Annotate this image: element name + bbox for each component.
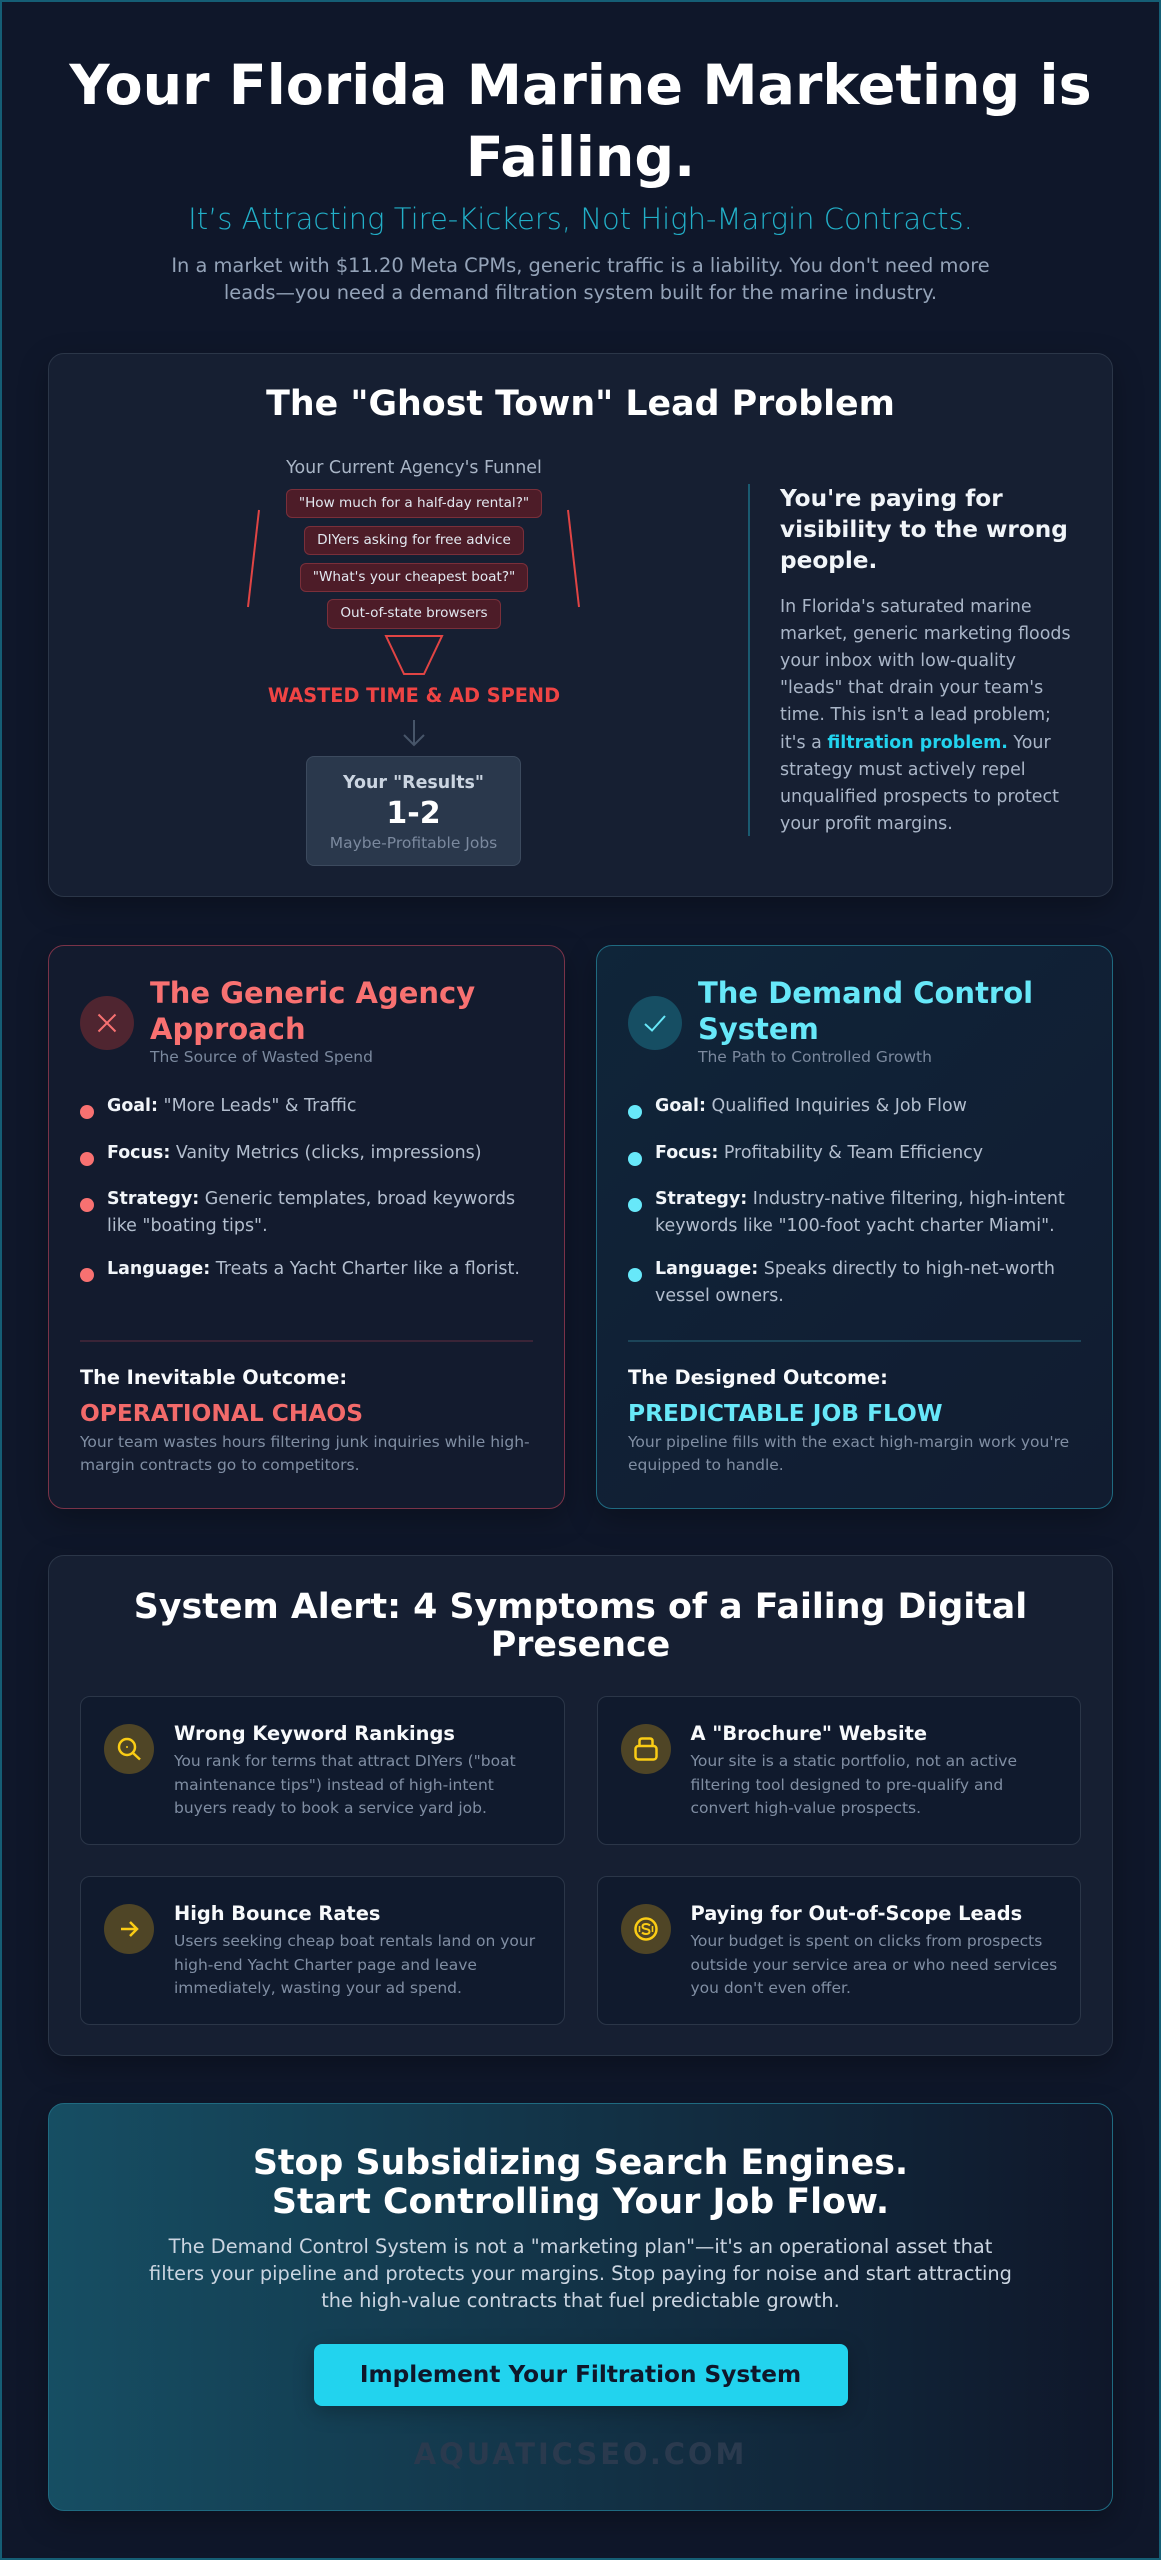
- symptom title: Wrong Keyword Rankings: [174, 1722, 455, 1744]
- symptom text: [174, 1752, 516, 1817]
- symptom text: You rank for terms that attract DIYers ("boat: [174, 1752, 516, 1770]
- title: Your Florida Marine Marketing is: [69, 52, 1092, 118]
- explanation heading: visibility to the wrong: [780, 516, 1068, 543]
- outcome description: Your pipeline fills with the exact high-margin work you're: [628, 1432, 1069, 1450]
- down arrow: [404, 720, 424, 746]
- lead pills: "What's your cheapest boat?": [313, 569, 515, 585]
- card title: The Demand Control: [698, 976, 1033, 1010]
- bullet: goal: Goal: Qualified Inquiries & Job Flow: [655, 1096, 967, 1116]
- symptom: wrong keyword rankings: [80, 1696, 564, 1845]
- explanation text: market, generic marketing floods: [780, 624, 1071, 644]
- symptom text: Your site is a static portfolio, not an active: [690, 1752, 1017, 1770]
- symptom text: immediately, wasting your ad spend.: [174, 1979, 462, 1997]
- intro text: In a market with $11.20 Meta CPMs, generic traffic is a liability. You don't need more: [171, 254, 990, 276]
- outcome description: [80, 1432, 530, 1474]
- funnel diagram: [247, 458, 580, 866]
- symptom text: you don't even offer.: [690, 1979, 851, 1997]
- card title: [150, 976, 475, 1046]
- symptom title: High Bounce Rates: [174, 1902, 380, 1924]
- subtitle: It’s Attracting Tire-Kickers, Not High-Margin Contracts.: [188, 202, 973, 236]
- cta button: Implement Your Filtration System: [360, 2361, 801, 2388]
- divider: [80, 1340, 533, 1342]
- cta text: the high-value contracts that fuel predictable growth.: [321, 2289, 840, 2312]
- symptom text: high-end Yacht Charter page and leave: [174, 1956, 477, 1974]
- explanation text: time. This isn't a lead problem;: [780, 705, 1051, 725]
- symptom text: convert high-value prospects.: [690, 1799, 921, 1817]
- outcome label: The Designed Outcome:: [628, 1366, 888, 1389]
- title: [68, 52, 1092, 190]
- bullet: strategy: [80, 1189, 515, 1236]
- results caption: Maybe-Profitable Jobs: [330, 834, 497, 852]
- intro text: leads—you need a demand filtration system built for the marine industry.: [224, 281, 937, 304]
- outcome description: Your team wastes hours filtering junk inquiries while high-: [80, 1432, 530, 1450]
- bullet: language: Language: Speaks directly to high-net-worth: [655, 1259, 1055, 1279]
- symptom text: [690, 1752, 1017, 1817]
- cta heading: [253, 2143, 908, 2222]
- cta button: [314, 2344, 848, 2406]
- bullet: strategy: Strategy: Industry-native filtering, high-intent: [655, 1189, 1065, 1209]
- panel: ghost town lead problem: [48, 353, 1113, 897]
- intro text: [171, 254, 990, 304]
- explanation text: strategy must actively repel: [780, 760, 1026, 780]
- cta heading: Stop Subsidizing Search Engines.: [253, 2143, 908, 2183]
- cta text: [149, 2234, 1012, 2312]
- lead pills: Out-of-state browsers: [340, 605, 488, 621]
- divider: [628, 1340, 1081, 1342]
- bullet: language: Language: Treats a Yacht Charter like a florist.: [107, 1259, 520, 1279]
- symptom text: Your budget is spent on clicks from prospects: [690, 1932, 1042, 1950]
- heading: system alert: System Alert: 4 Symptoms of a Failing Digital: [134, 1587, 1027, 1627]
- card subtitle: The Path to Controlled Growth: [698, 1048, 932, 1066]
- symptom: high bounce rates: [80, 1876, 564, 2025]
- symptom text: maintenance tips") instead of high-intent: [174, 1776, 494, 1794]
- bullet: focus: Focus: Vanity Metrics (clicks, impressions): [107, 1142, 482, 1162]
- bullet: language: vessel owners.: [655, 1286, 784, 1306]
- symptom text: [690, 1932, 1057, 1997]
- cta heading: Start Controlling Your Job Flow.: [272, 2182, 889, 2222]
- explanation text: "leads" that drain your team's: [780, 678, 1043, 698]
- icon: magnifier: [104, 1724, 154, 1774]
- outcome label: The Inevitable Outcome:: [80, 1366, 347, 1389]
- explanation text: your inbox with low-quality: [780, 651, 1016, 671]
- outcome description: margin contracts go to competitors.: [80, 1456, 360, 1474]
- panel: generic agency approach: [48, 945, 564, 1509]
- symptom text: filtering tool designed to pre-qualify and: [690, 1776, 1003, 1794]
- explanation heading: [780, 484, 1068, 574]
- lead pills: DIYers asking for free advice: [317, 532, 511, 548]
- symptom: out-of-scope leads: [596, 1876, 1081, 2025]
- explanation heading: You're paying for: [780, 484, 1003, 512]
- symptom text: [174, 1932, 536, 1997]
- bullet: language: [628, 1259, 1055, 1306]
- panel: call to action: [48, 2103, 1113, 2511]
- panel: system alert symptoms: [48, 1555, 1113, 2056]
- icon: arrow right: [104, 1904, 154, 1954]
- bullet: focus: Focus: Profitability & Team Efficiency: [655, 1142, 983, 1162]
- heading: ghost town: The "Ghost Town" Lead Problem: [266, 384, 895, 424]
- funnel outline: [247, 510, 580, 675]
- card subtitle: The Source of Wasted Spend: [150, 1048, 373, 1066]
- explanation text: In Florida's saturated marine: [780, 596, 1032, 616]
- card title: System: [698, 1012, 819, 1046]
- panel: demand control system: [596, 945, 1112, 1509]
- bullet: strategy: like "boating tips".: [107, 1216, 268, 1236]
- card title: Approach: [150, 1012, 306, 1046]
- card title: The Generic Agency: [150, 976, 475, 1010]
- bullet: strategy: keywords like "100-foot yacht charter Miami".: [655, 1216, 1055, 1236]
- funnel label: Your Current Agency's Funnel: [286, 458, 542, 478]
- explanation column: [748, 484, 1080, 836]
- explanation text: it's a filtration problem. Your: [780, 733, 1051, 753]
- icon: check mark: [628, 996, 682, 1050]
- outcome headline: PREDICTABLE JOB FLOW: [628, 1400, 943, 1427]
- heading: system alert: [134, 1587, 1027, 1665]
- results label: Your "Results": [343, 773, 484, 793]
- symptom title: Paying for Out-of-Scope Leads: [690, 1902, 1022, 1924]
- symptom text: Users seeking cheap boat rentals land on your: [174, 1932, 535, 1950]
- wasted label: WASTED TIME & AD SPEND: [268, 684, 560, 707]
- icon: dollar coin: [620, 1904, 670, 1954]
- header: [68, 52, 1092, 304]
- explanation heading: people.: [780, 547, 877, 574]
- bullet: strategy: Strategy: Generic templates, broad keywords: [107, 1189, 515, 1209]
- explanation text: unqualified prospects to protect: [780, 787, 1059, 807]
- symptom title: A "Brochure" Website: [690, 1722, 927, 1744]
- bullet: strategy: [628, 1189, 1065, 1236]
- results box: [306, 756, 521, 866]
- symptom text: outside your service area or who need services: [690, 1956, 1057, 1974]
- explanation text: your profit margins.: [780, 814, 953, 834]
- bullet: goal: Goal: "More Leads" & Traffic: [107, 1096, 356, 1116]
- results value: 1-2: [386, 796, 441, 831]
- card title: [698, 976, 1033, 1046]
- cta text: The Demand Control System is not a "marketing plan"—it's an operational asset that: [169, 2234, 992, 2258]
- brand watermark: AQUATICSEO.COM: [414, 2437, 747, 2471]
- icon: x mark: [80, 996, 134, 1050]
- heading: system alert: Presence: [491, 1625, 670, 1665]
- symptom text: buyers ready to book a service yard job.: [174, 1799, 487, 1817]
- outcome description: equipped to handle.: [628, 1456, 784, 1474]
- explanation text: [780, 596, 1071, 834]
- lead pills: [286, 489, 542, 629]
- icon: brochure: [620, 1724, 670, 1774]
- symptom: brochure website: [596, 1696, 1081, 1845]
- lead pills: "How much for a half-day rental?": [299, 495, 529, 511]
- title: Failing.: [466, 124, 695, 190]
- outcome headline: OPERATIONAL CHAOS: [80, 1400, 363, 1427]
- outcome description: [628, 1432, 1069, 1474]
- cta text: filters your pipeline and protects your margins. Stop paying for noise and start attracting: [149, 2262, 1012, 2285]
